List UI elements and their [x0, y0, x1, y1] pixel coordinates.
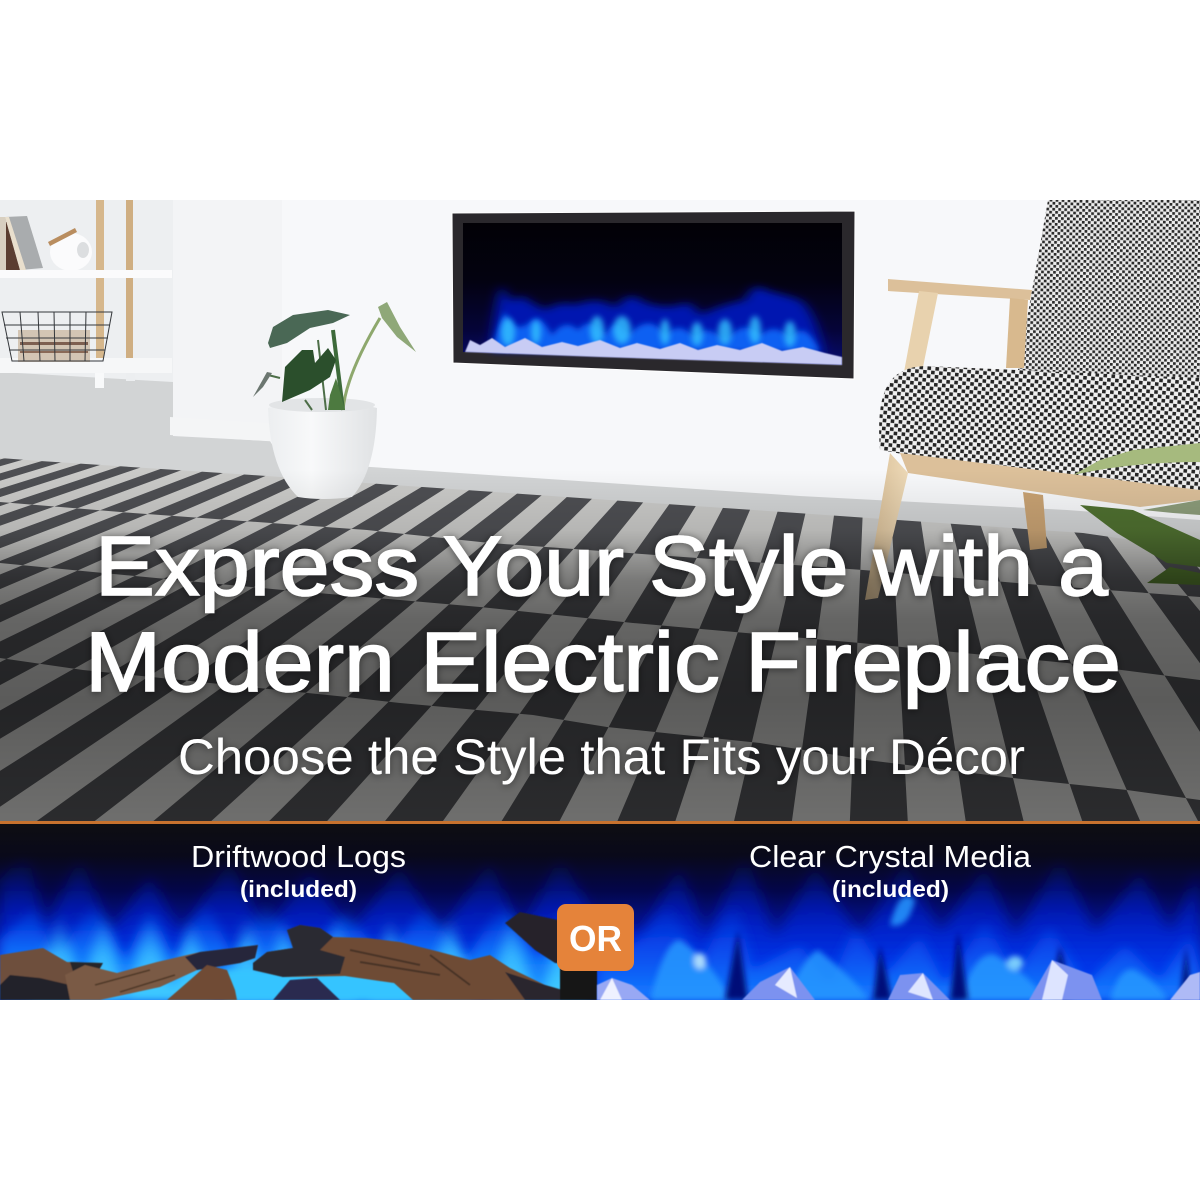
light blue tongues left	[31, 918, 590, 1000]
title line 1: Express Your Style with a	[95, 519, 1108, 613]
OR badge: OR	[569, 918, 622, 959]
subtitle: Choose the Style that Fits your Décor	[178, 729, 1025, 785]
label: driftwood logs: Driftwood Logs	[191, 839, 406, 874]
orange divider	[0, 821, 1200, 824]
left log	[0, 947, 100, 986]
mid blue flames left	[0, 906, 597, 1000]
label: clear crystal media: (included)	[832, 876, 949, 902]
armchair	[865, 200, 1200, 600]
chair backrest	[1018, 200, 1200, 385]
fireplace	[452, 211, 855, 379]
OR badge	[557, 904, 634, 971]
label: driftwood logs	[191, 839, 406, 902]
wall	[0, 200, 1200, 530]
chair arm	[888, 279, 1032, 300]
chair frame	[900, 453, 1200, 507]
foreground plant	[1073, 443, 1200, 585]
stone	[273, 978, 340, 1000]
chair back leg	[1023, 492, 1047, 550]
striped rug	[0, 458, 1200, 821]
mid blue flames right	[597, 895, 1200, 1000]
label: driftwood logs: (included)	[240, 876, 357, 902]
chair seat	[879, 366, 1200, 490]
cyan glow between logs	[225, 970, 435, 1000]
flame band	[0, 824, 1200, 1000]
fireplace flames	[490, 285, 825, 355]
potted plant	[253, 302, 416, 499]
dark flame gaps right	[725, 930, 1192, 1000]
title line 2: Modern Electric Fireplace	[85, 615, 1121, 709]
label: clear crystal media	[749, 839, 1032, 902]
tall blue flames	[0, 860, 1200, 985]
title	[85, 519, 1121, 709]
floor	[0, 373, 1200, 540]
shelf unit	[0, 200, 172, 388]
crystal media pieces	[597, 960, 1200, 1000]
wall pillar	[173, 200, 282, 442]
diagonal log	[65, 945, 258, 1000]
top log	[504, 912, 558, 964]
bright flame tongues right	[650, 896, 1168, 1000]
center log	[253, 924, 560, 1000]
chair front leg	[865, 453, 908, 600]
baseboard	[170, 417, 270, 442]
label: clear crystal media: Clear Crystal Media	[749, 839, 1032, 874]
shelf alcove background	[0, 200, 173, 390]
driftwood logs	[0, 912, 597, 1000]
firebox	[463, 223, 842, 365]
infographic scene	[0, 200, 1200, 1000]
dark rug overlay	[0, 470, 1200, 824]
fireplace frame	[452, 211, 855, 379]
small log	[167, 965, 237, 1000]
room photo	[0, 200, 1200, 1010]
crystal media	[465, 338, 842, 365]
